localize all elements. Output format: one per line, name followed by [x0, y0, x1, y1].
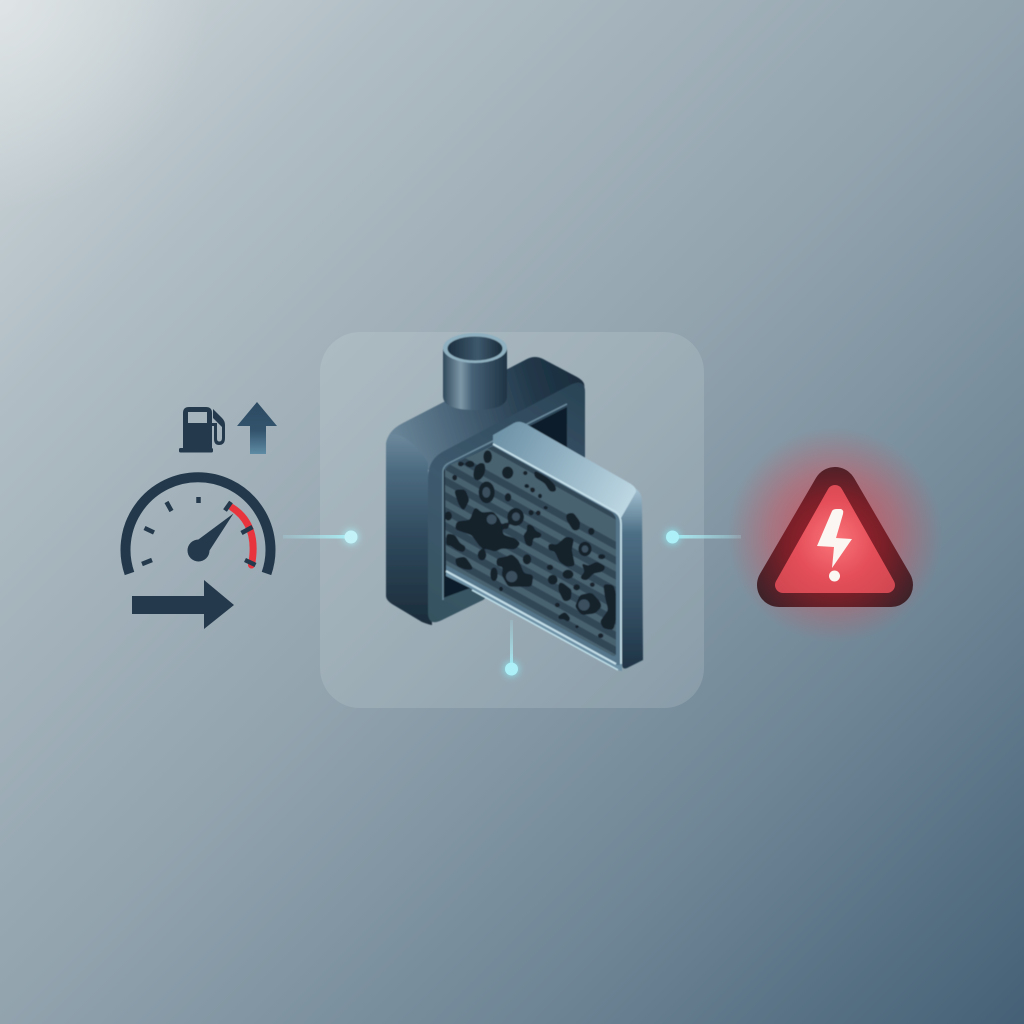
icon: fuel pump — [179, 407, 225, 452]
illustration: filter housing with clogged filter — [386, 333, 643, 671]
panel: central rounded card — [320, 332, 704, 708]
icon: speedometer gauge — [126, 477, 270, 574]
housing left face — [386, 434, 432, 625]
icon: rightward arrow — [132, 580, 234, 629]
filter bottom rail — [446, 565, 622, 671]
gauge red zone — [232, 508, 253, 565]
gauge ticks — [142, 497, 256, 565]
filter mesh — [444, 446, 616, 656]
connector: left — [283, 529, 359, 545]
gauge outer arc — [126, 477, 270, 574]
connector: bottom — [504, 620, 520, 677]
icon: upward arrow — [237, 402, 277, 454]
connector: right — [664, 529, 741, 545]
filter top face — [493, 422, 636, 518]
housing window — [443, 407, 567, 598]
warning inner triangle — [783, 493, 887, 585]
housing frame highlight — [443, 404, 567, 600]
icon: warning triangle — [727, 427, 943, 643]
gauge needle — [191, 514, 234, 559]
lightning bolt — [817, 509, 852, 568]
soot highlights — [482, 487, 590, 611]
housing front frame — [428, 383, 585, 622]
filter right side — [620, 488, 643, 668]
filter frame — [445, 445, 621, 665]
warning glow — [727, 427, 943, 643]
exclamation dot — [829, 570, 840, 582]
warning outer triangle — [779, 489, 891, 585]
soot deposits — [445, 450, 617, 638]
housing top face — [386, 357, 584, 470]
pipe — [443, 333, 507, 410]
gauge hub — [188, 540, 210, 562]
